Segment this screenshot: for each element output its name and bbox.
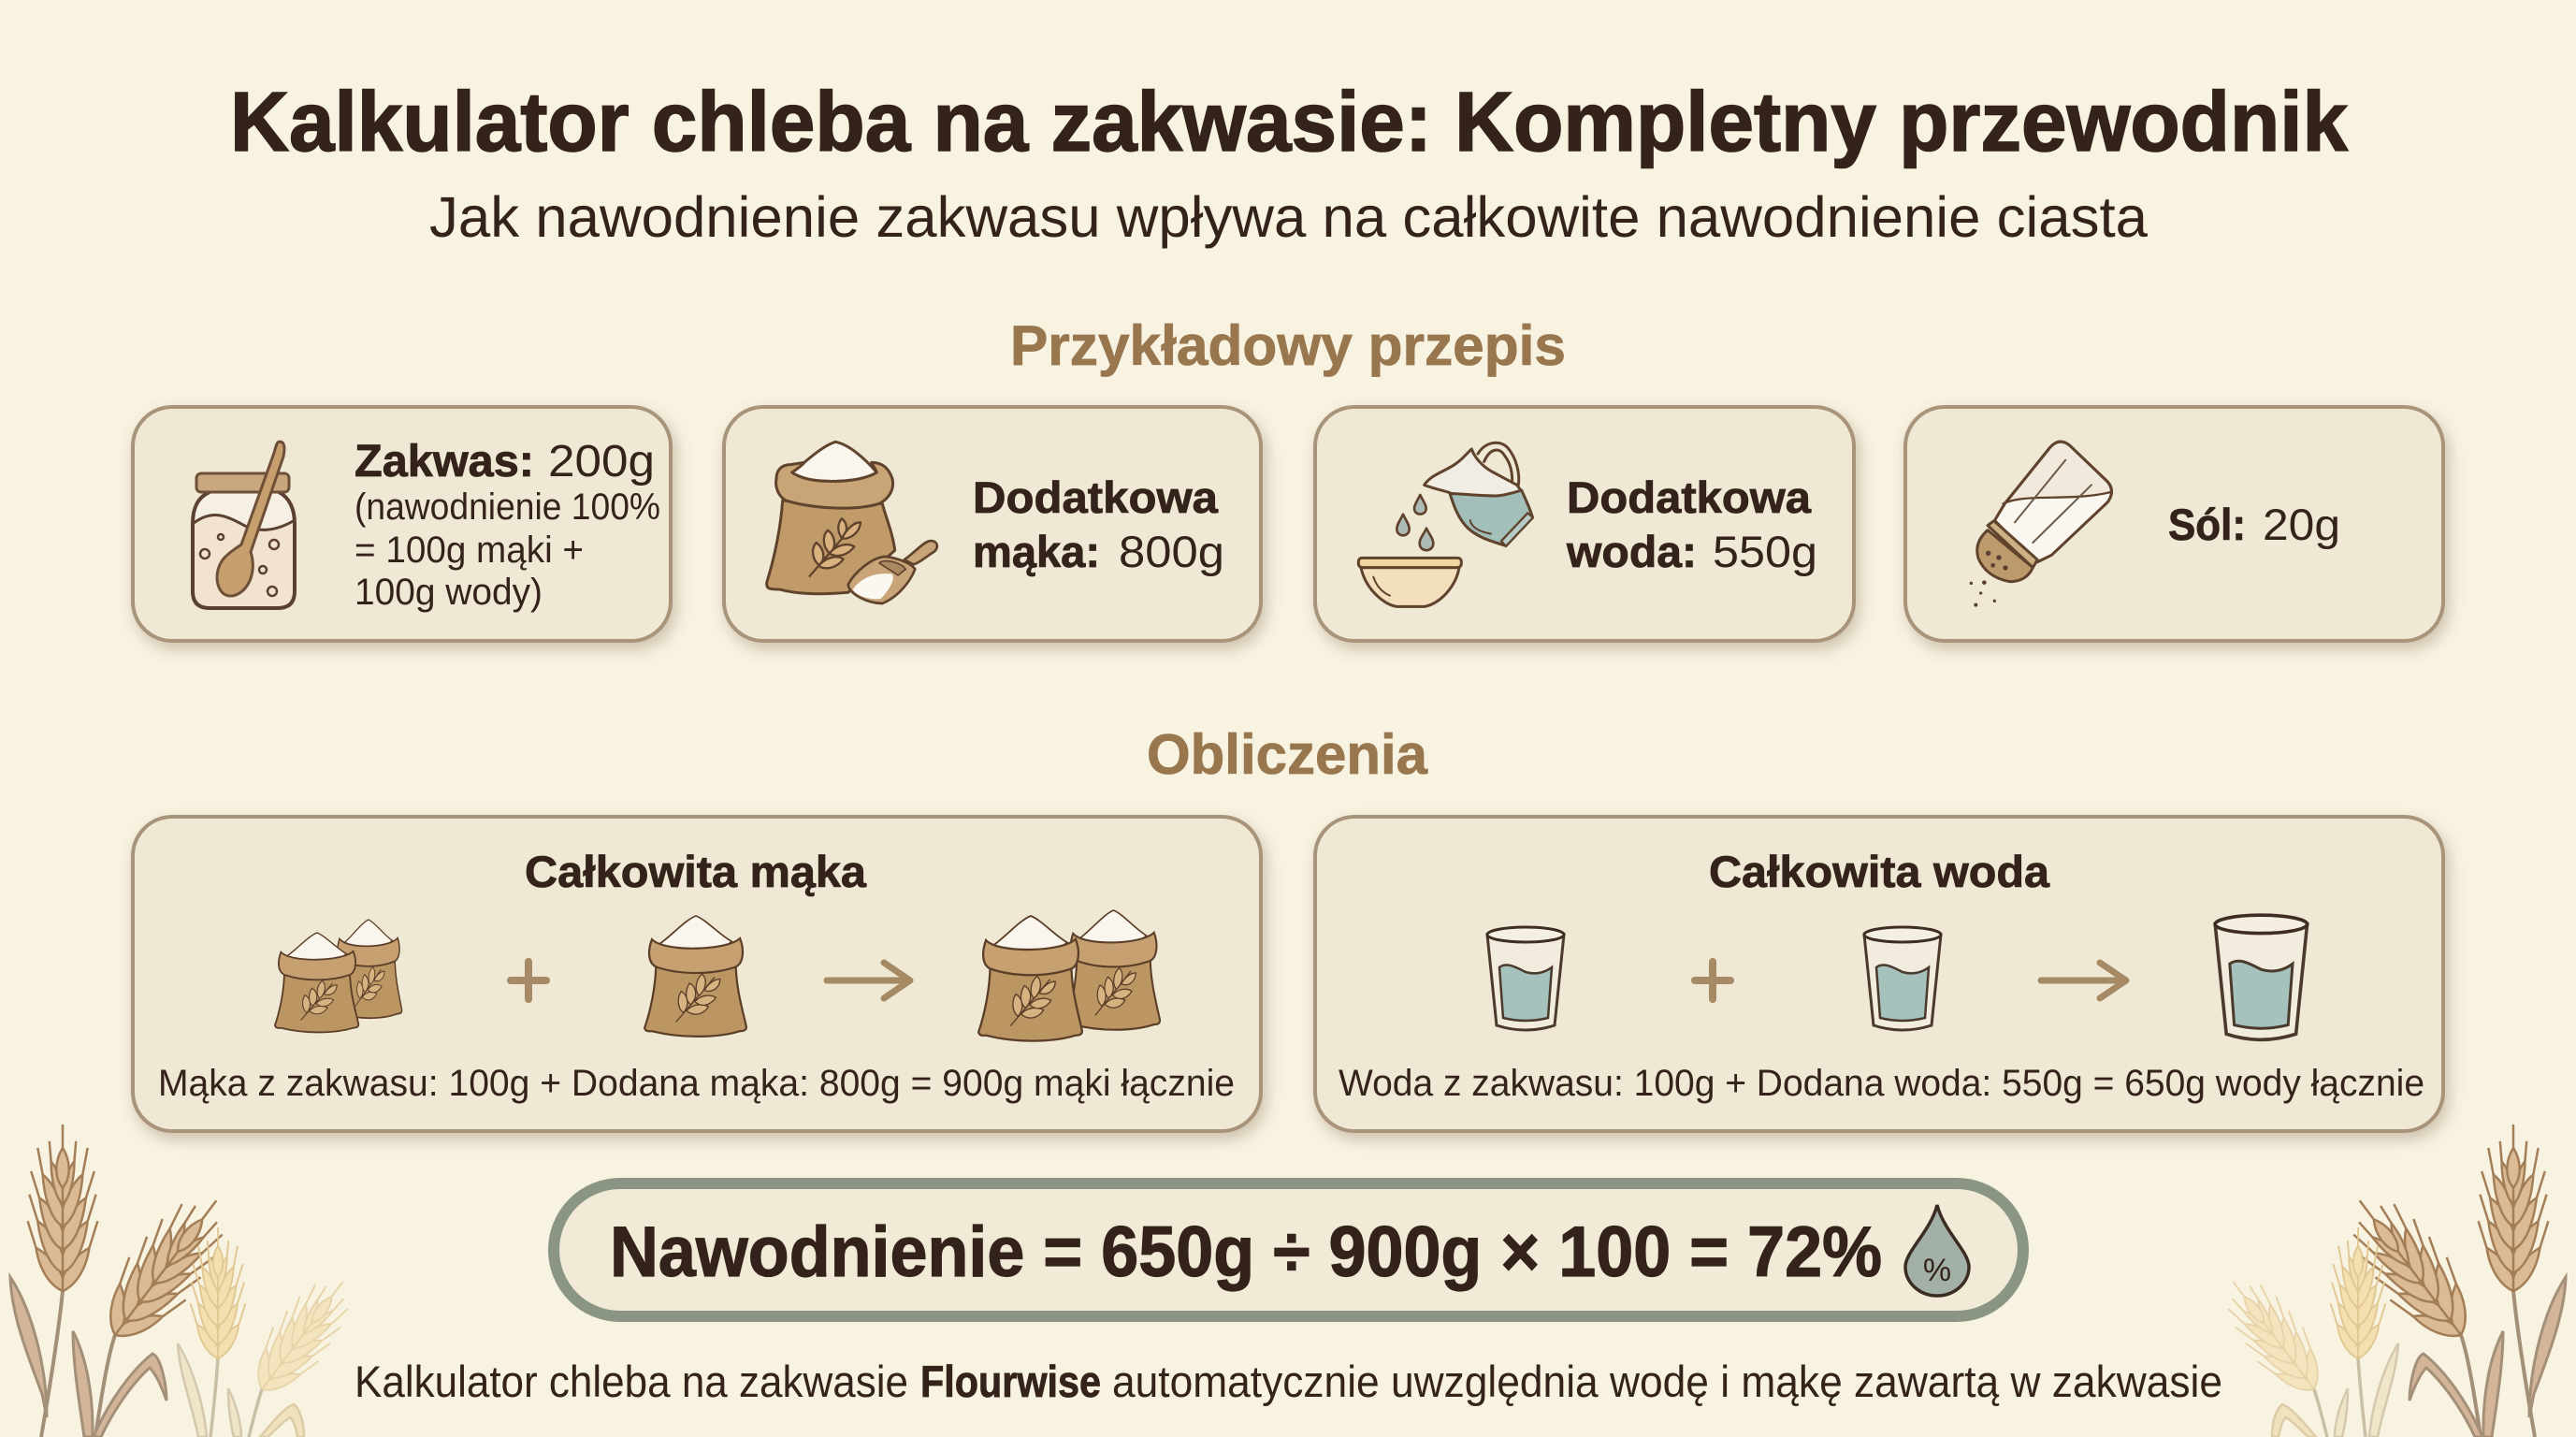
footer note: Flourwise [920,1357,1101,1406]
wheat decoration: bottom left [10,1125,366,1437]
text: extra flour label [973,472,1224,576]
icon: large glass of water [2215,915,2308,1039]
title: Kalkulator chleba na zakwasie: Kompletny przewodnik [230,76,2349,169]
text: extra flour label: 800g [1119,527,1224,576]
text: salt label: Sól: [2168,500,2246,549]
arrow [2041,963,2126,998]
icon: flour sack with scoop [767,442,937,603]
text: extra water label: woda: [1566,527,1697,576]
footer note: Kalkulator chleba na zakwasie [355,1357,908,1406]
text: extra water label: Dodatkowa [1567,472,1812,522]
text: starter label: (nawodnienie 100% [355,486,660,528]
icon: water drop with percent: % [1923,1253,1951,1288]
panel: total water [1315,817,2443,1131]
text: starter label: 200g [548,437,655,486]
icon: glass of water [1864,927,1941,1030]
text: extra flour label: Dodatkowa [973,472,1219,522]
icon: two large flour sacks [978,910,1160,1041]
formula text: Nawodnienie = 650g ÷ 900g × 100 = 72% [610,1212,1882,1292]
footer note: automatycznie uwzględnia wodę i mąkę zawartą w zakwasie [1112,1357,2222,1406]
equation: total water: Woda z zakwasu: 100g + Dodana woda: 550g = 650g wody łącznie [1339,1063,2424,1104]
panel: total flour [133,817,1261,1131]
plus sign [1695,962,1730,999]
icon: water drop with percent [1905,1205,1969,1296]
equation: total flour: Mąka z zakwasu: 100g + Dodana mąka: 800g = 900g mąki łącznie [158,1063,1235,1104]
text: starter label: 100g wody) [355,572,543,613]
icon: jar with spoon [193,442,295,608]
footer note [355,1357,2222,1406]
icon: glass of water [1487,927,1564,1030]
text: extra water label: 550g [1713,527,1817,576]
arrow [827,963,910,998]
text: salt label [2168,500,2340,549]
callout: hydration formula [554,1183,2023,1316]
subtitle: Jak nawodnienie zakwasu wpływa na całkowite nawodnienie ciasta [429,185,2148,249]
icon: pitcher pouring into bowl [1358,443,1533,606]
plus sign [511,962,546,999]
text: extra water label [1566,472,1817,576]
icon: one flour sack [644,916,746,1037]
wheat decoration: bottom right [2210,1125,2566,1437]
icon: salt shaker [1970,442,2111,607]
text: starter label [355,437,660,613]
panel heading: total water: Całkowita woda [1709,847,2050,896]
heading: example recipe: Przykładowy przepis [1010,314,1566,377]
panel: salt card [1905,407,2443,641]
panel: extra flour card [724,407,1261,641]
text: starter label: Zakwas: [355,437,534,486]
heading: calculations: Obliczenia [1147,723,1428,786]
panel heading: total flour: Całkowita mąka [525,847,867,896]
panel: starter card [133,407,671,641]
panel: extra water card [1315,407,1854,641]
text: extra flour label: mąka: [973,527,1100,576]
text: salt label: 20g [2263,500,2340,549]
icon: two flour sacks [275,920,402,1032]
text: starter label: = 100g mąki + [355,530,584,571]
